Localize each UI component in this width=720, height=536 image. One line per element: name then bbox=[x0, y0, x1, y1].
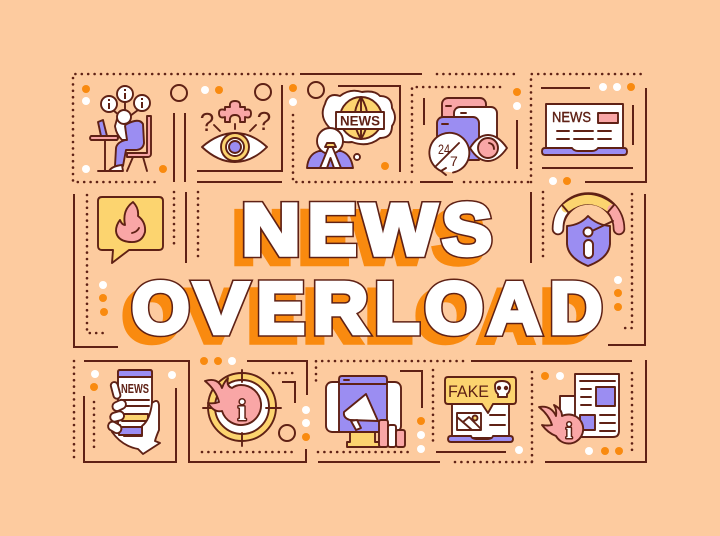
title shadow: N bbox=[233, 198, 292, 278]
icon: newspaper with burning info sign: i bbox=[566, 418, 572, 443]
title fill: E bbox=[308, 190, 357, 270]
title outline: O bbox=[425, 268, 483, 349]
title shadow bbox=[123, 197, 594, 357]
icon: target with burning info sign: i bbox=[238, 394, 246, 427]
icon: eye with puzzle piece: ? bbox=[257, 106, 271, 136]
icon: monitor with megaphone and bar chart bbox=[326, 376, 405, 447]
title outline: S bbox=[442, 189, 492, 270]
title outline: E bbox=[308, 190, 357, 270]
title shadow: V bbox=[186, 277, 240, 357]
title shadow: R bbox=[304, 276, 360, 356]
icon: 24/7 browser windows and eye: 24 bbox=[438, 141, 450, 157]
title fill: N bbox=[242, 190, 300, 270]
icon: worried person with news thought cloud: NEWS bbox=[340, 114, 380, 128]
title fill bbox=[132, 189, 602, 349]
title outline: O bbox=[132, 269, 189, 349]
title fill: S bbox=[442, 189, 492, 270]
icon: gauge and info shield bbox=[558, 198, 619, 266]
icon: fake news speech bubble on laptop: FAKE bbox=[448, 382, 489, 401]
icon: 24/7 browser windows and eye: 7 bbox=[450, 153, 458, 169]
title outline: D bbox=[550, 268, 602, 349]
title fill: O bbox=[132, 269, 189, 349]
title outline: N bbox=[242, 190, 300, 270]
title shadow: O bbox=[123, 277, 181, 357]
icon: 24/7 browser windows and eye bbox=[429, 98, 507, 175]
title outline: L bbox=[375, 269, 419, 349]
title fill: R bbox=[313, 268, 368, 348]
title outline: V bbox=[194, 269, 248, 349]
icon: hand holding phone: NEWS bbox=[121, 381, 149, 396]
title fill: W bbox=[362, 190, 437, 270]
icon: person at desk with info bubbles bbox=[90, 86, 151, 171]
icon: fake news speech bubble on laptop bbox=[445, 377, 516, 442]
title fill: V bbox=[194, 269, 248, 349]
title shadow: D bbox=[541, 276, 594, 357]
title shadow: E bbox=[248, 277, 296, 357]
icon: laptop with news page: NEWS bbox=[552, 110, 591, 126]
title outline: R bbox=[313, 268, 368, 348]
title shadow: A bbox=[479, 276, 533, 357]
icon: eye with puzzle piece bbox=[200, 101, 271, 162]
title shadow: L bbox=[366, 277, 411, 357]
title shadow: W bbox=[353, 198, 428, 278]
icon: laptop with news page bbox=[542, 104, 627, 155]
icon: eye with puzzle piece: ? bbox=[200, 107, 214, 137]
title outline: A bbox=[488, 268, 541, 349]
title fill: E bbox=[257, 269, 305, 349]
title shadow: S bbox=[434, 197, 483, 278]
title fill: D bbox=[550, 268, 602, 349]
title: NEWS OVERLOAD bbox=[123, 189, 602, 357]
title outline: E bbox=[257, 269, 305, 349]
title shadow: O bbox=[416, 276, 475, 357]
icon: newspaper with burning info sign bbox=[539, 374, 619, 443]
title outline: W bbox=[362, 190, 437, 270]
icon: speech bubble with flame bbox=[98, 197, 163, 263]
title fill: A bbox=[488, 268, 541, 349]
icon: target with burning info sign bbox=[203, 370, 281, 446]
icon: hand holding phone bbox=[106, 370, 160, 454]
title fill: O bbox=[425, 268, 483, 349]
icon: worried person with news thought cloud bbox=[307, 91, 395, 168]
title outline bbox=[132, 189, 602, 349]
title shadow: E bbox=[299, 198, 348, 278]
title fill: L bbox=[375, 269, 419, 349]
